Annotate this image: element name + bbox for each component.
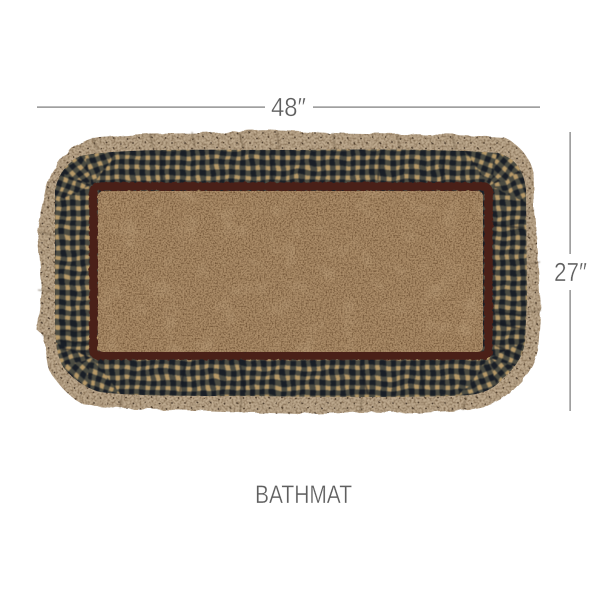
gingham corner bottom left [56,342,121,394]
ruffle pleat marks [38,131,541,412]
outer dotted ruffle [37,130,541,414]
light blotches [98,191,483,352]
gathered fold shadows [58,153,524,394]
height dimension line [570,132,571,411]
product caption: BATHMAT [255,481,352,509]
bathmat rug [37,130,541,414]
gingham corner bottom right [458,341,525,396]
red chenille border [94,186,488,356]
width dimension line [37,106,540,108]
height label: 27″ [554,257,587,287]
shag center [98,191,483,352]
gingham corner top left [55,152,115,204]
gingham corner top right [464,151,526,202]
gingham band [55,150,527,397]
width label: 48″ [271,92,306,122]
